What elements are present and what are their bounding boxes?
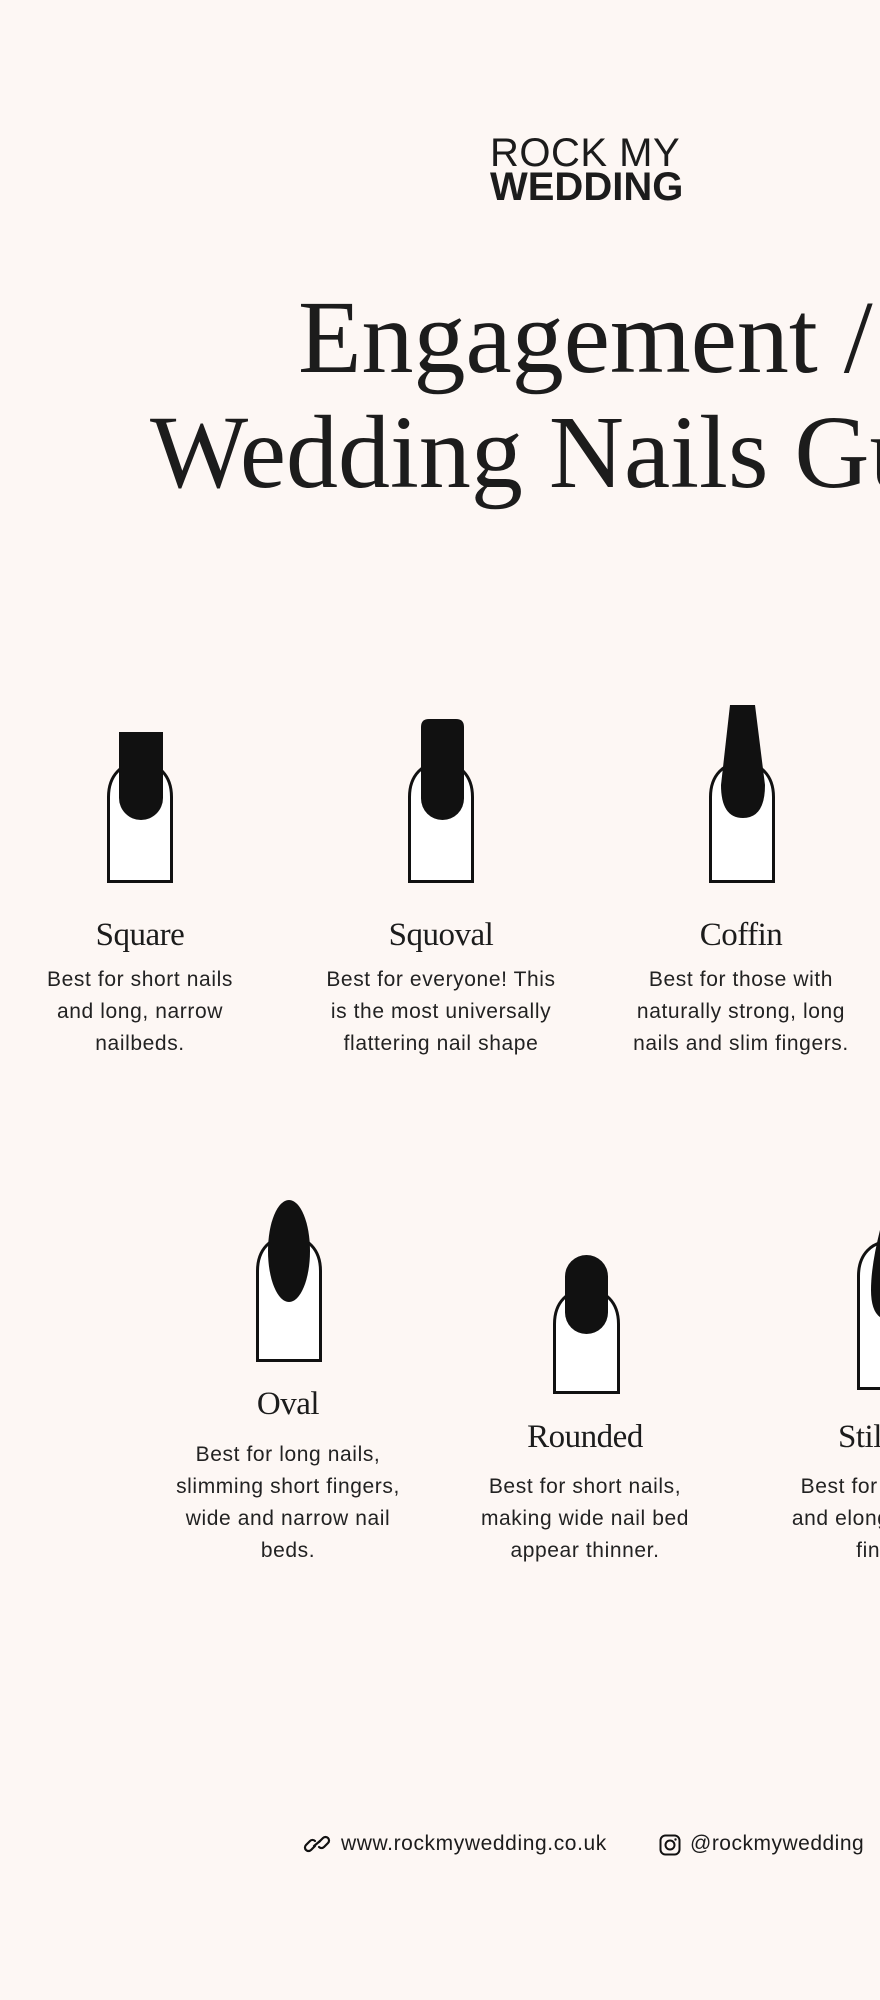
- text: squoval description: Best for everyone! This: [326, 968, 556, 991]
- footer: website: www.rockmywedding.co.uk: [341, 1832, 607, 1855]
- icon: square nail: [107, 732, 173, 883]
- text: coffin description: naturally strong, long: [637, 1000, 845, 1023]
- text: rounded description: Best for short nails,: [489, 1475, 681, 1498]
- footer: instagram: @rockmywedding: [690, 1832, 864, 1855]
- icon: stiletto nail: [857, 1230, 880, 1390]
- icon: rounded nail: [553, 1255, 620, 1394]
- icon: instagram: [660, 1834, 680, 1856]
- label: square: Square: [96, 917, 184, 953]
- label: rounded: Rounded: [527, 1419, 643, 1455]
- text: coffin description: Best for those with: [649, 968, 833, 991]
- text: square description: and long, narrow: [57, 1000, 223, 1023]
- icon: coffin nail: [709, 705, 775, 883]
- icon: squoval nail: [408, 719, 474, 883]
- text: coffin description: [633, 968, 849, 1055]
- text: squoval description: is the most universally: [331, 1000, 551, 1023]
- logo: WEDDING: [490, 165, 683, 209]
- title: [150, 280, 880, 510]
- text: oval description: slimming short fingers,: [176, 1475, 400, 1498]
- text: squoval description: flattering nail shape: [344, 1032, 538, 1055]
- text: oval description: [176, 1443, 400, 1562]
- label: squoval: Squoval: [389, 917, 493, 953]
- icon: oval nail: [256, 1200, 322, 1362]
- title: Engagement /: [298, 280, 873, 395]
- text: square description: [47, 968, 233, 1055]
- text: squoval description: [326, 968, 556, 1055]
- text: rounded description: appear thinner.: [510, 1539, 660, 1562]
- text: square description: Best for short nails: [47, 968, 233, 991]
- text: rounded description: [481, 1475, 689, 1562]
- text: stiletto description: [792, 1475, 880, 1562]
- label: coffin: Coffin: [700, 917, 782, 953]
- text: square description: nailbeds.: [95, 1032, 185, 1055]
- text: oval description: Best for long nails,: [196, 1443, 380, 1466]
- text: oval description: wide and narrow nail: [186, 1507, 390, 1530]
- label: oval: Oval: [257, 1386, 319, 1422]
- panel: stiletto (clipped): [792, 1230, 880, 1562]
- icon: link: [304, 1836, 330, 1852]
- logo: [490, 131, 683, 209]
- text: coffin description: nails and slim fingers.: [633, 1032, 849, 1055]
- text: oval description: beds.: [261, 1539, 315, 1562]
- text: rounded description: making wide nail bed: [481, 1507, 689, 1530]
- logo: ROCK MY: [490, 131, 680, 175]
